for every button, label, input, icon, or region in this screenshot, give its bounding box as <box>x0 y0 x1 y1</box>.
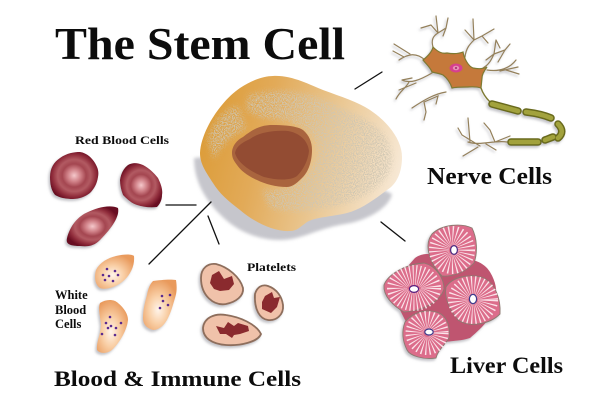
white blood cell 1 <box>95 254 134 289</box>
platelet 2 <box>255 285 283 320</box>
lobule top <box>428 225 476 276</box>
white blood cells label <box>55 288 88 331</box>
title: The Stem Cell <box>55 18 345 69</box>
axon <box>492 104 562 142</box>
platelets <box>201 264 283 345</box>
red blood cells <box>50 152 162 246</box>
platelets label: Platelets <box>247 262 297 274</box>
cytoplasm speckle <box>208 91 392 211</box>
liver cells label: Liver Cells <box>450 353 563 378</box>
platelet 1 <box>201 264 243 304</box>
red blood cell 3 <box>67 206 118 246</box>
white blood cells label: White <box>55 288 88 302</box>
liver cells <box>384 225 500 359</box>
white blood cells <box>95 254 177 353</box>
neuron nucleus <box>450 64 462 72</box>
cell body <box>423 47 487 88</box>
nerve cells label: Nerve Cells <box>427 164 552 190</box>
white blood cell 2 <box>97 300 128 353</box>
nerve cell <box>393 16 562 156</box>
red blood cell 1 <box>50 152 98 199</box>
lobule bottom <box>403 311 449 359</box>
red blood cells label: Red Blood Cells <box>75 135 170 147</box>
lobule left <box>384 263 444 312</box>
white blood cells label: Cells <box>55 317 82 331</box>
white blood cells label: Blood <box>55 303 86 317</box>
lobule right <box>446 276 500 324</box>
platelet 3 <box>203 315 261 345</box>
dendrites <box>393 16 519 156</box>
blood and immune cells label: Blood & Immune Cells <box>54 366 301 391</box>
white blood cell 3 <box>143 280 177 330</box>
nucleus <box>232 125 312 187</box>
connector lines <box>149 72 405 264</box>
red blood cell 2 <box>120 163 162 207</box>
stem cell <box>194 76 402 240</box>
